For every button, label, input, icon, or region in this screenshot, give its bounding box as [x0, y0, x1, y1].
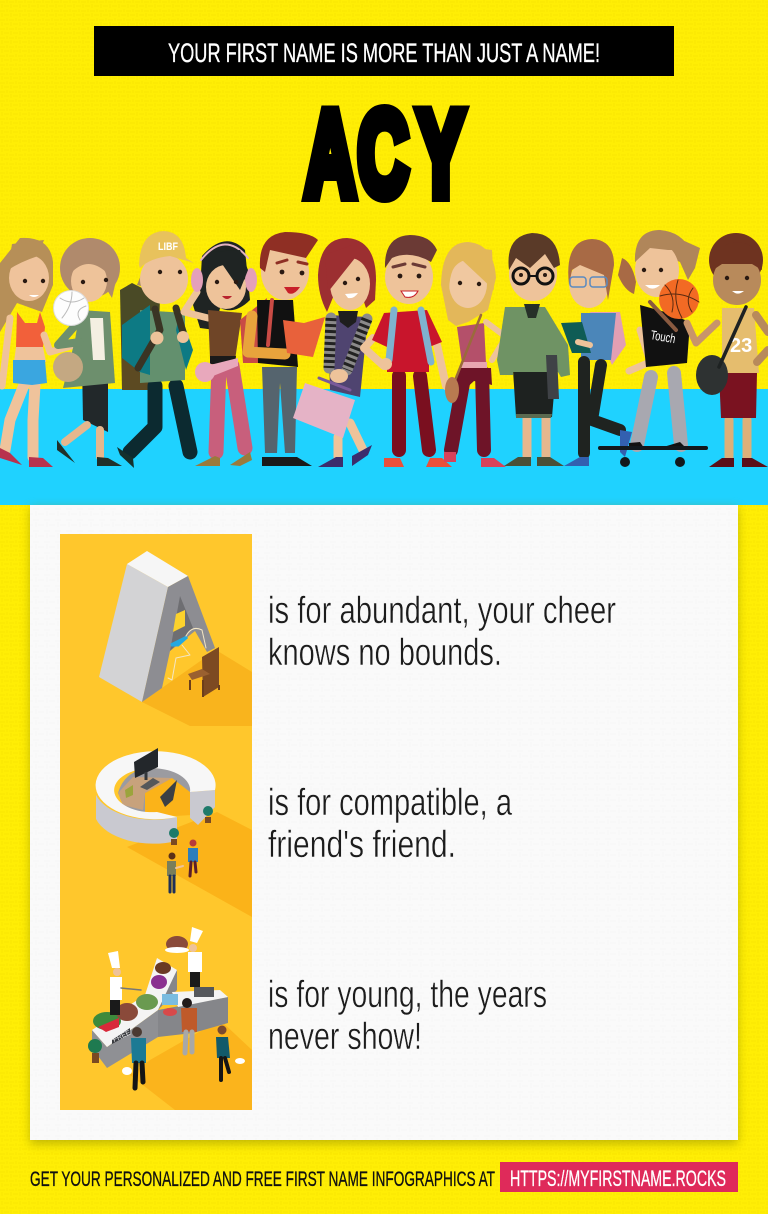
- person 3: hiker with yellow cap and backpack: LIBF: [158, 241, 178, 253]
- text: Y line: [268, 974, 547, 1058]
- blue floor band: [0, 389, 768, 505]
- icon: chef with tongs: [108, 951, 141, 1015]
- title banner: [94, 26, 674, 76]
- person 11: skateboarder with basketball: [600, 230, 717, 467]
- panel: white card: [30, 505, 738, 1144]
- icon: isometric letter Y food buffet: [88, 927, 252, 1110]
- icon: isometric letter C reception desk: [96, 748, 252, 917]
- illustration: row of twelve people: [0, 230, 768, 468]
- icon: food dishes: [93, 962, 214, 1032]
- icon: isometric letter A with chair: [99, 551, 252, 726]
- text: A line: knows no bounds.: [268, 632, 502, 674]
- icon: isometric letter Y food buffet: FREE: [112, 1029, 132, 1044]
- person 6: red-haired girl with pink bag: [293, 238, 376, 467]
- person 8: blonde girl in pink top: [441, 242, 506, 467]
- name heading: ACY: [305, 86, 464, 221]
- person 1: girl in orange top: [0, 238, 78, 467]
- icon: potted plants: [169, 806, 213, 845]
- text: C line: [268, 782, 513, 866]
- text: Y line: never show!: [268, 1016, 422, 1058]
- person 9: boy with glasses in green sweater: [497, 233, 570, 466]
- person 3: hiker with yellow cap and backpack: [117, 231, 194, 468]
- person 10: girl with tablet and ponytail: [561, 239, 636, 466]
- person 5: boy reading a book: [240, 232, 325, 466]
- text: Y line: is for young, the years: [268, 974, 547, 1016]
- text: C line: is for compatible, a: [268, 782, 513, 824]
- icon: buffet customers: [122, 998, 245, 1088]
- panel: orange illustration column: [60, 534, 252, 1110]
- text: A line: is for abundant, your cheer: [268, 590, 616, 632]
- footer call to action: GET YOUR PERSONALIZED AND FREE FIRST NAME INFOGRAPHICS AT: [30, 1168, 495, 1191]
- icon: two people talking: [167, 840, 198, 892]
- person 4: girl with pink headphones: [184, 241, 257, 466]
- icon: potted plant: [88, 1039, 102, 1063]
- text: A line: [268, 590, 616, 674]
- person 12: boy with shoulder bag: 23: [730, 335, 752, 357]
- person 12: boy with shoulder bag: [696, 233, 768, 467]
- person 11: skateboarder with basketball: Touch: [649, 327, 677, 346]
- person 2: girl with volleyball: [53, 238, 122, 466]
- icon: chef carrying a roast: [165, 927, 203, 987]
- text: C line: friend's friend.: [268, 824, 456, 866]
- person 7: boy in red shirt: [364, 235, 452, 467]
